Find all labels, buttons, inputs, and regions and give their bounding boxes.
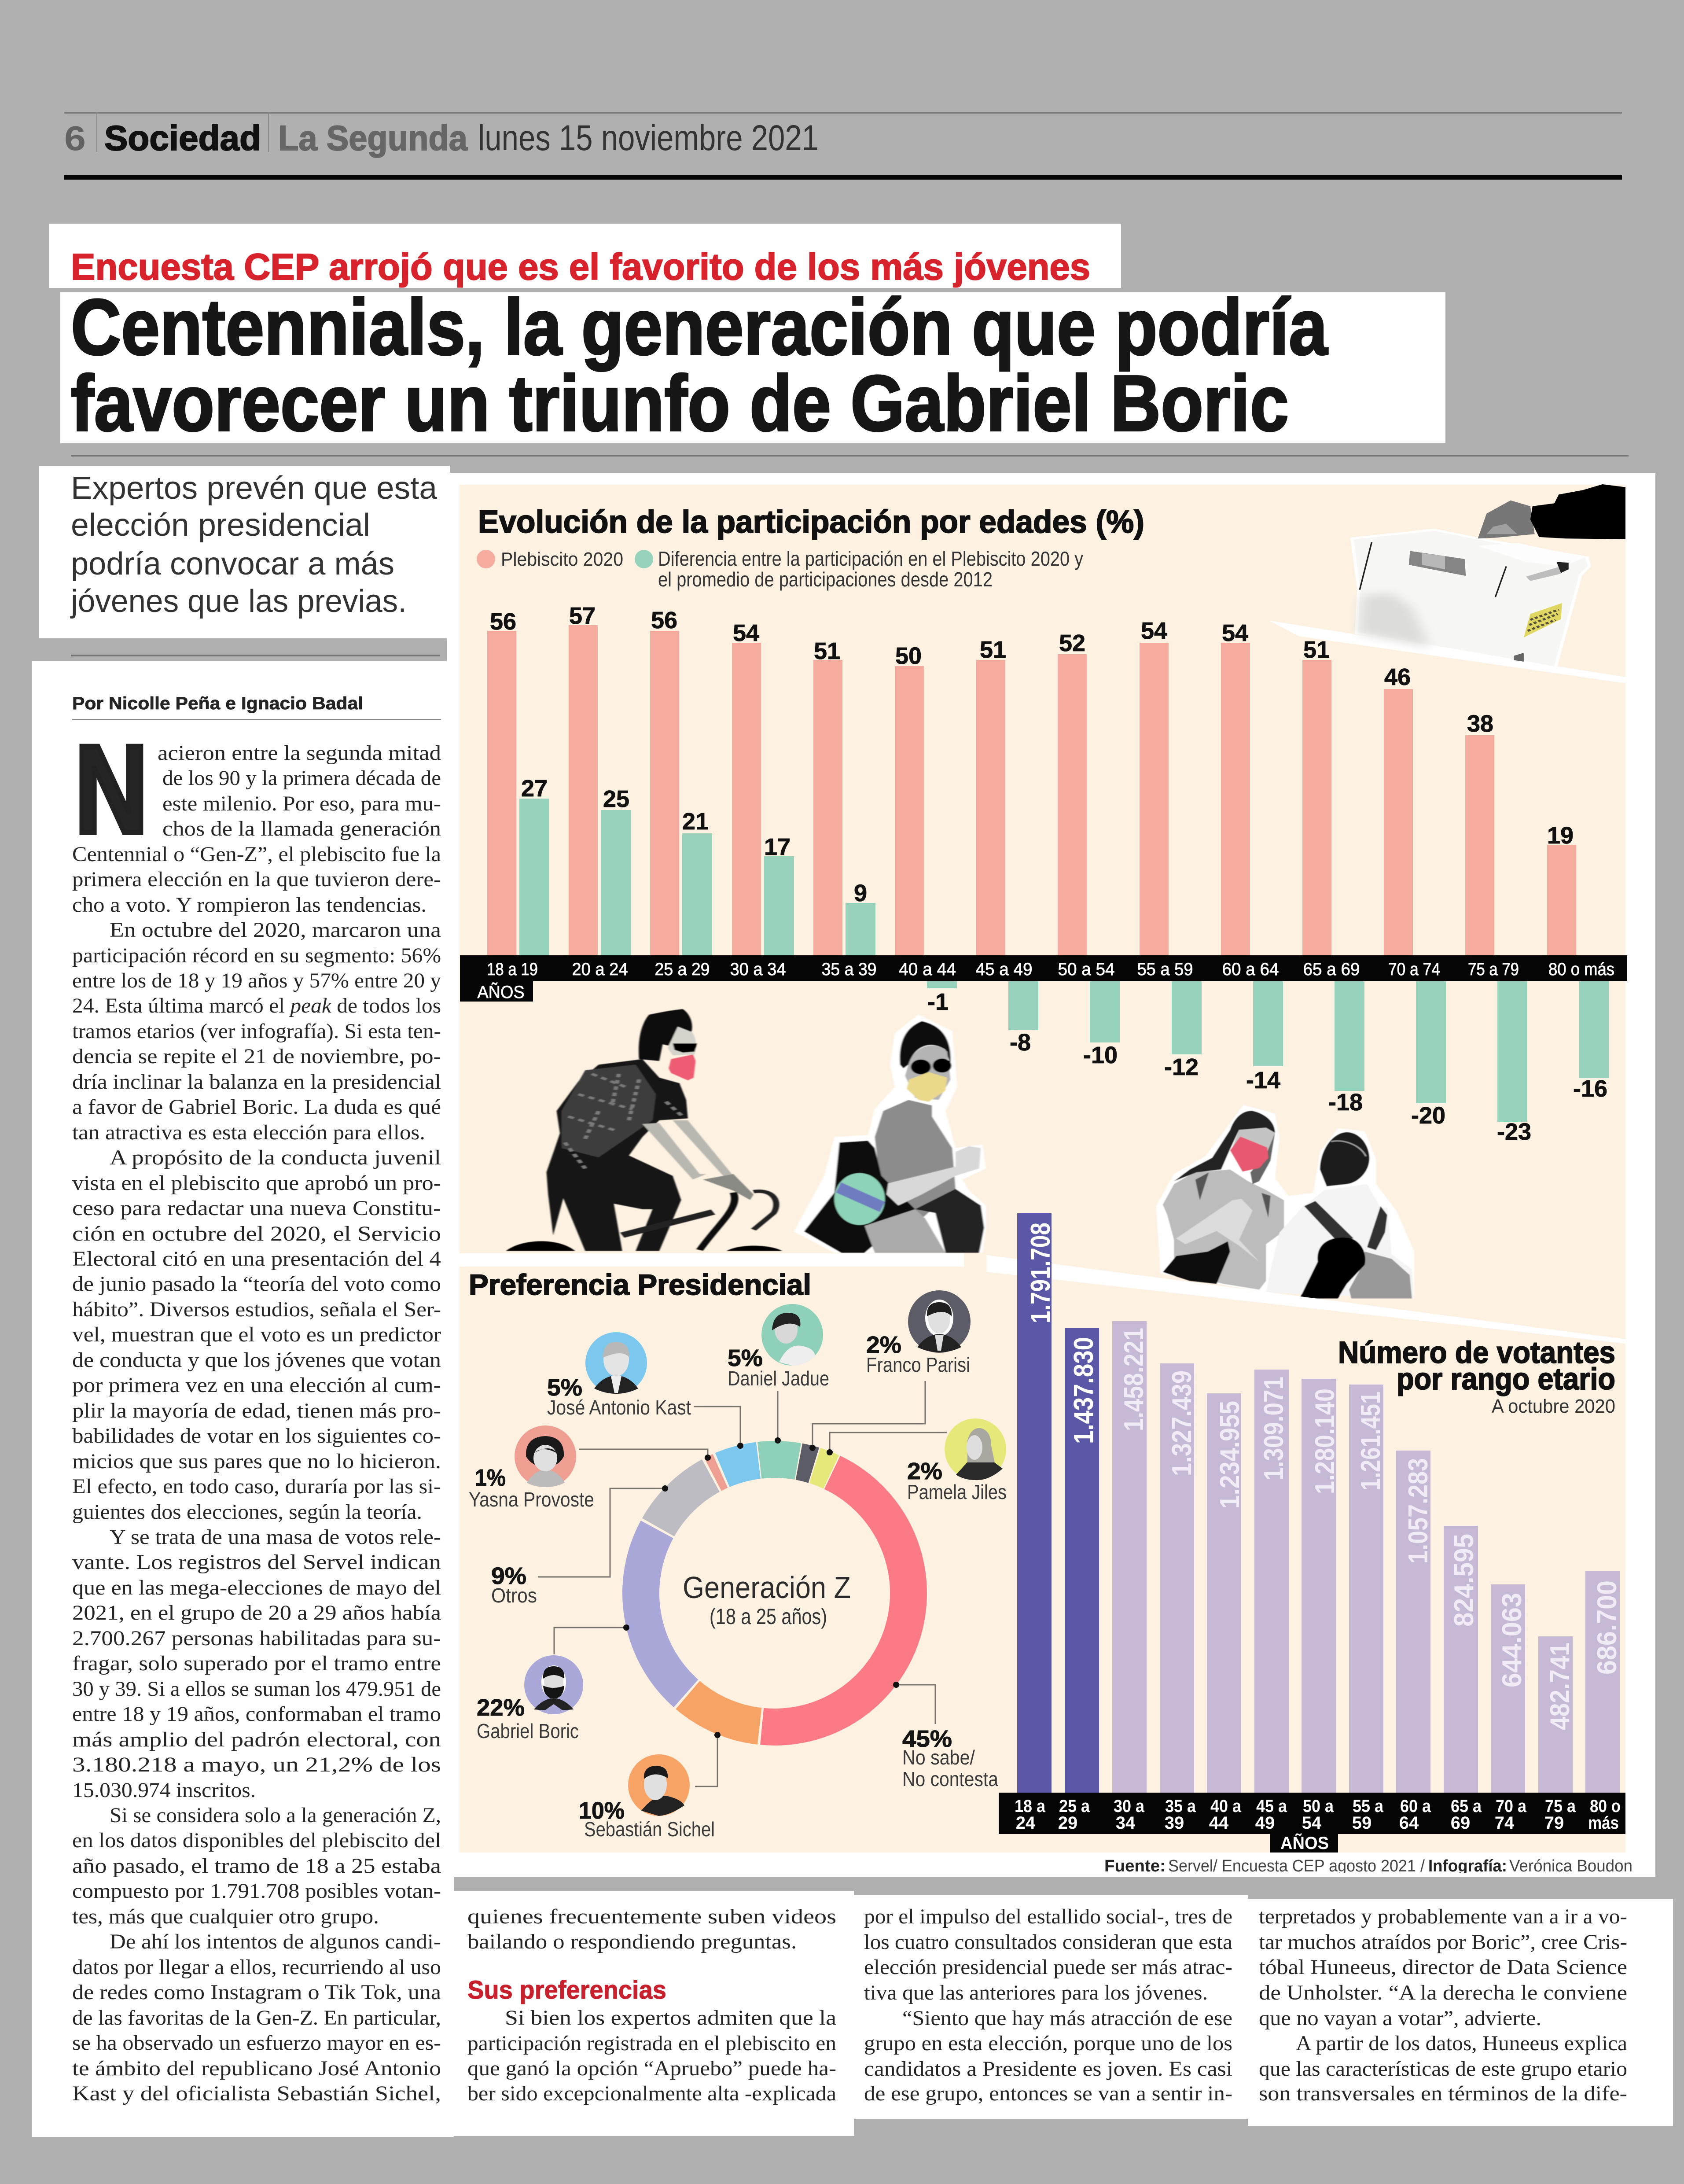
candidate: Franco Parisi: 2% (866, 1332, 901, 1358)
bar value labels: 21 (682, 808, 709, 835)
article column 1: te ámbito del republicano José Antonio (72, 2057, 441, 2080)
page header: Sociedad (104, 118, 261, 158)
age axis band: 55 a 59 (1137, 960, 1193, 979)
voters chart title (1338, 1335, 1615, 1417)
article column 2 (454, 1891, 854, 2136)
article column 1: tes, más que cualquier otro grupo. (72, 1905, 379, 1928)
chart legend: Diferencia entre la participación en el Plebiscito 2020 y (658, 547, 1083, 570)
photo: cyclist with pink mask (506, 1009, 782, 1251)
voters age axis band: AÑOS (1280, 1833, 1329, 1853)
article column 4: que no vayan a votar”, advierte. (1259, 2007, 1541, 2030)
candidate: Yasna Provoste: Yasna Provoste (469, 1488, 594, 1511)
article column 1: dencia se repite el 21 de noviembre, po- (72, 1045, 441, 1068)
article column 2: Si bien los expertos admiten que la (505, 2006, 836, 2029)
candidate: Gabriel Boric: Gabriel Boric (477, 1720, 579, 1742)
candidate: Franco Parisi (866, 1290, 971, 1376)
article column 4 (1248, 1899, 1673, 2126)
article column 1: babilidades de votar en los siguientes co- (72, 1424, 441, 1447)
voters age axis band: 25 a (1059, 1797, 1090, 1816)
donut center label (683, 1570, 851, 1629)
candidate: Pamela Jiles: 2% (907, 1458, 942, 1484)
article column 4: tóbal Huneeus, director de Data Science (1259, 1956, 1627, 1979)
voters age axis band: 39 (1165, 1813, 1184, 1833)
voter value labels: 1.458.221 (1119, 1328, 1149, 1431)
candidate: Pamela Jiles (907, 1418, 1007, 1503)
voters age axis band: 44 (1209, 1813, 1229, 1833)
page header: lunes 15 noviembre 2021 (478, 118, 819, 158)
candidate: Pamela Jiles: Pamela Jiles (907, 1481, 1007, 1503)
voter value labels: 686.700 (1592, 1580, 1622, 1675)
article column 1: vista en el plebiscito que aprobó un pro- (72, 1171, 441, 1195)
article column 1: participación récord en su segmento: 56% (72, 944, 441, 967)
bar value labels: 54 (1222, 620, 1248, 646)
voters age axis band: 34 (1116, 1813, 1136, 1833)
article column 1: de los 90 y la primera década de (162, 766, 441, 790)
main title: favorecer un triunfo de Gabriel Boric (71, 359, 1289, 448)
donut title: Preferencia Presidencial (469, 1268, 811, 1301)
icon: ballot box with hand (1352, 484, 1625, 667)
candidate: José Antonio Kast: 5% (547, 1374, 582, 1401)
kicker headline (49, 224, 1121, 288)
panel: infographic white backing (447, 473, 1655, 1877)
article column 2: quienes frecuentemente suben videos (467, 1905, 836, 1928)
article column 3: de ese grupo, entonces se van a sentir in- (864, 2082, 1232, 2105)
deck text: podría convocar a más (71, 546, 394, 582)
voters age axis band: 18 a (1015, 1797, 1046, 1816)
article column 1: ción en octubre del 2020, el Servicio (72, 1222, 441, 1245)
article column 1: Kast y del oficialista Sebastián Sichel, (72, 2082, 441, 2105)
donut center label: (18 a 25 años) (710, 1604, 827, 1629)
voters age axis band: 79 (1544, 1813, 1564, 1833)
label: otros: Otros (491, 1584, 537, 1607)
age axis band: 65 a 69 (1303, 960, 1360, 979)
bar value labels: 51 (1303, 637, 1330, 663)
candidate: Daniel Jadue (728, 1304, 829, 1390)
article column 1: Por Nicolle Peña e Ignacio Badal (72, 694, 363, 713)
chart legend: el promedio de participaciones desde 2012 (658, 568, 993, 591)
article column 1: vel, muestran que el voto es un predictor (72, 1323, 441, 1346)
article column 3: por el impulso del estallido social-, tres de (864, 1905, 1232, 1928)
article column 2: participación registrada en el plebiscito en (467, 2032, 836, 2055)
voter value labels: 1.280.140 (1310, 1388, 1340, 1494)
bar value labels: 25 (603, 786, 629, 812)
bar value labels: 54 (1141, 618, 1167, 644)
chart legend: Plebiscito 2020 (501, 549, 623, 570)
donut center label: Generación Z (683, 1570, 851, 1605)
article column 1: que en las mega-elecciones de mayo del (72, 1576, 441, 1599)
article column 1: De ahí los intentos de algunos candi- (110, 1930, 441, 1953)
bar value labels: -10 (1083, 1042, 1118, 1068)
bar value labels: 56 (490, 608, 516, 635)
article column 1: hábito”. Diversos estudios, señala el Ser- (72, 1298, 441, 1321)
candidate: Yasna Provoste (469, 1425, 594, 1511)
article column 1: N (75, 720, 148, 859)
voters age axis band: 70 a (1496, 1797, 1527, 1816)
article column 1: 2021, en el grupo de 20 a 29 años había (72, 1601, 441, 1624)
article column 1: dría inclinar la balanza en la presidencial (72, 1070, 441, 1094)
age axis band: 45 a 49 (975, 960, 1033, 979)
voters age axis band: 30 a (1114, 1797, 1145, 1816)
age axis band: 75 a 79 (1468, 960, 1519, 979)
article column 1: entre los de 18 y 19 años y 57% entre 20 y (72, 969, 441, 992)
voters chart title: por rango etario (1397, 1362, 1615, 1396)
voter value labels: 1.234.955 (1215, 1401, 1245, 1509)
voters chart title: A octubre 2020 (1492, 1396, 1615, 1417)
candidate: Gabriel Boric: 22% (477, 1694, 525, 1721)
deck text: elección presidencial (71, 508, 370, 543)
article column 1: año pasado, el tramo de 18 a 25 estaba (72, 1854, 441, 1878)
bar value labels: 57 (569, 603, 596, 629)
article column 1: datos por llegar a ellos, recurriendo al uso (72, 1956, 441, 1979)
candidate: Daniel Jadue: Daniel Jadue (728, 1367, 829, 1390)
voter value labels: 644.063 (1497, 1593, 1527, 1687)
label: no sabe / no contesta: No contesta (902, 1768, 998, 1790)
article column 2: ber sido excepcionalmente alta -explicada (467, 2082, 836, 2105)
age axis band: 70 a 74 (1388, 960, 1440, 979)
photo: woman with yellow mask (794, 1015, 986, 1253)
age axis band: 40 a 44 (899, 960, 956, 979)
article column 1: Centennial o “Gen-Z”, el plebiscito fue la (72, 843, 441, 866)
deck text: jóvenes que las previas. (70, 584, 407, 619)
bar value labels: 51 (814, 638, 840, 664)
chart title: Evolución de la participación por edades (%) (478, 505, 1144, 540)
article column 1: más amplio del padrón electoral, con (72, 1728, 441, 1751)
voters age axis band: 75 a (1545, 1797, 1576, 1816)
bar value labels: 17 (764, 834, 791, 860)
voters age axis band: 54 (1302, 1813, 1322, 1833)
source credit: Verónica Boudon (1509, 1857, 1633, 1875)
article column 1: a favor de Gabriel Boric. La duda es qué (72, 1095, 441, 1119)
candidate: Franco Parisi: Franco Parisi (866, 1353, 970, 1376)
age axis band: 18 a 19 (487, 960, 538, 979)
donut chart: preferencia presidencial (586, 1404, 963, 1782)
bar value labels: -20 (1411, 1102, 1445, 1129)
voter value labels: 1.791.708 (1026, 1223, 1056, 1323)
candidate: Gabriel Boric (477, 1655, 583, 1742)
label: no sabe / no contesta: No sabe/ (902, 1746, 975, 1769)
bar value labels: 9 (854, 880, 867, 906)
source credit: Fuente: (1104, 1857, 1166, 1875)
article column 3 (854, 1895, 1248, 2119)
bar value labels: -1 (927, 989, 949, 1015)
article column 1: fragar, solo superado por el tramo entre (72, 1652, 441, 1675)
voters age axis band: 40 a (1210, 1797, 1242, 1816)
photo: two students (1156, 1105, 1414, 1299)
candidate: Daniel Jadue: 5% (728, 1345, 763, 1371)
article column 3: “Siento que hay más atracción de ese (902, 2007, 1232, 2030)
article column 3: elección presidencial puede ser más atrac- (864, 1956, 1232, 1979)
article column 1: 30 y 39. Si a ellos se suman los 479.951 de (72, 1677, 441, 1701)
article column 1: primera elección en la que tuvieron dere- (72, 868, 441, 891)
article column 1: vante. Los registros del Servel indican (72, 1551, 441, 1574)
label: otros (491, 1563, 537, 1607)
voters age axis band: 50 a (1303, 1797, 1334, 1816)
bar value labels: 19 (1547, 822, 1574, 849)
article column 1: este milenio. Por eso, para mu- (162, 792, 441, 815)
article column 3: grupo en esta elección, porque uno de los (864, 2032, 1232, 2055)
bar value labels: 50 (895, 643, 922, 669)
page header: La Segunda (278, 118, 467, 158)
bar value labels: 54 (733, 620, 759, 646)
article column 2: que ganó la opción “Apruebo” puede ha- (467, 2057, 836, 2080)
article column 1: 3.180.218 a mayo, un 21,2% de los (72, 1753, 441, 1776)
source credit (1104, 1857, 1633, 1875)
article column 2: Sus preferencias (467, 1976, 666, 2004)
age axis band: 30 a 34 (730, 960, 786, 979)
article column 1: 24. Esta última marcó el peak de todos los (72, 994, 441, 1017)
article column 1: A propósito de la conducta juvenil (110, 1146, 441, 1169)
voters age axis band (999, 1793, 1625, 1853)
candidate: José Antonio Kast: José Antonio Kast (547, 1396, 691, 1419)
voters age axis band: 65 a (1451, 1797, 1482, 1816)
source credit: Infografía: (1428, 1857, 1507, 1875)
age axis band: 60 a 64 (1222, 960, 1279, 979)
source credit: Servel/ Encuesta CEP agosto 2021 / (1168, 1857, 1425, 1875)
article column 1 (32, 661, 454, 2137)
article column 1: Electoral citó en una presentación del 4 (72, 1247, 441, 1271)
voter value labels: 1.057.283 (1403, 1458, 1434, 1564)
kicker headline: Encuesta CEP arrojó que es el favorito de los más jóvenes (71, 246, 1090, 287)
age axis band (460, 955, 1627, 1002)
candidate: Sebastián Sichel: 10% (579, 1797, 625, 1824)
article column 4: de Unholster. “A la derecha le conviene (1259, 1981, 1627, 2004)
voters age axis band: 35 a (1165, 1797, 1196, 1816)
bar value labels: -18 (1328, 1089, 1363, 1116)
bar value labels: -14 (1246, 1067, 1280, 1094)
candidate: José Antonio Kast (547, 1332, 691, 1419)
label: otros: 9% (491, 1563, 526, 1589)
bar value labels: -16 (1573, 1075, 1607, 1102)
deck text (39, 466, 450, 638)
article column 1: plir la mayoría de edad, tienen más pro- (72, 1399, 441, 1422)
voters age axis band: 45 a (1256, 1797, 1287, 1816)
article column 1: de conducta y que los jóvenes que votan (72, 1348, 441, 1372)
article column 3: candidatos a Presidente es joven. Es casi (864, 2057, 1232, 2081)
article column 1: ceso para redactar una nueva Constitu- (72, 1197, 441, 1220)
voters age axis band: 24 (1016, 1813, 1036, 1833)
article column 1: se ha observado un esfuerzo mayor en es- (72, 2031, 441, 2055)
article column 1: Si se considera solo a la generación Z, (110, 1804, 441, 1827)
voters age axis band: 60 a (1400, 1797, 1431, 1816)
panel: infographic cream background (460, 485, 1625, 1853)
bar value labels: 51 (980, 637, 1006, 663)
bar value labels (490, 603, 1607, 1145)
chart legend (477, 547, 1083, 591)
article column 4: tar muchos atraídos por Boric”, cree Cris- (1259, 1930, 1627, 1954)
bar value labels: 27 (521, 775, 548, 802)
article column 1: 2.700.267 personas habilitadas para su- (72, 1627, 441, 1650)
voter value labels: 1.309.071 (1259, 1377, 1289, 1481)
page header (64, 112, 1622, 180)
article column 1: de redes como Instagram o Tik Tok, una (72, 1981, 441, 2004)
voters age axis band: 55 a (1353, 1797, 1384, 1816)
voters age axis band: 49 (1255, 1813, 1275, 1833)
deck text: Expertos prevén que esta (71, 471, 438, 506)
candidate: Yasna Provoste: 1% (475, 1465, 506, 1491)
page header: 6 (64, 119, 86, 158)
label: no sabe / no contesta: 45% (902, 1726, 952, 1752)
article column 1: Y se trata de una masa de votos rele- (110, 1525, 441, 1549)
voters age axis band: 29 (1058, 1813, 1077, 1833)
article column 1: El efecto, en todo caso, duraría por las si- (72, 1475, 441, 1498)
voters age axis band: más (1588, 1813, 1619, 1833)
label: no sabe / no contesta (902, 1726, 998, 1790)
article column 4: terpretados y probablemente van a ir a vo- (1259, 1905, 1627, 1928)
article column 1: acieron entre la segunda mitad (158, 741, 441, 765)
bar value labels: -8 (1010, 1029, 1031, 1056)
main title: Centennials, la generación que podría (71, 283, 1328, 372)
bar chart: difference (519, 799, 1609, 1122)
article column 1: guientes dos elecciones, según la teoría. (72, 1500, 422, 1524)
voter value labels: 482.741 (1545, 1643, 1575, 1730)
article column 4: son transversales en términos de la dife- (1259, 2082, 1627, 2105)
age axis band: 20 a 24 (572, 960, 628, 979)
bar value labels: 46 (1384, 664, 1411, 690)
article column 1: de junio pasado la “teoría del voto como (72, 1272, 441, 1296)
age axis band: AÑOS (477, 982, 525, 1002)
voter value labels: 1.327.439 (1167, 1370, 1197, 1476)
age axis band: 35 a 39 (821, 960, 877, 979)
article column 1: chos de la llamada generación (162, 817, 441, 840)
bar chart: número de votantes (1017, 1213, 1620, 1793)
article column 2: bailando o respondiendo preguntas. (467, 1930, 797, 1953)
bar value labels: 56 (651, 607, 677, 633)
candidate: Sebastián Sichel (579, 1754, 715, 1841)
article column 3: los cuatro consultados consideran que esta (864, 1930, 1232, 1954)
candidate: Sebastián Sichel: Sebastián Sichel (584, 1818, 715, 1841)
article column 1: tan atractiva es esta elección para ellos. (72, 1121, 425, 1144)
article column 1: tramos etarios (ver infografía). Si esta ten- (72, 1020, 441, 1043)
age axis band: 80 o más (1548, 960, 1614, 979)
article column 1: En octubre del 2020, marcaron una (110, 918, 441, 942)
voters chart title: Número de votantes (1338, 1335, 1615, 1370)
bar value labels: 38 (1467, 711, 1493, 737)
article column 1: por primera vez en una elección al cum- (72, 1374, 441, 1397)
voter value labels: 1.437.830 (1069, 1337, 1099, 1444)
voters age axis band: 69 (1451, 1813, 1470, 1833)
bar value labels: -12 (1164, 1054, 1199, 1080)
voters age axis band: 80 o (1590, 1797, 1621, 1816)
bar value labels: 52 (1059, 630, 1085, 656)
voters age axis band: 74 (1495, 1813, 1515, 1833)
bar chart: plebiscito 2020 (487, 625, 1576, 955)
voter value labels: 824.595 (1449, 1534, 1479, 1627)
donut leader lines (538, 1381, 947, 1786)
voters age axis band: 59 (1352, 1813, 1371, 1833)
voter value labels (1026, 1223, 1622, 1730)
article column 1: cho a voto. Y rompieron las tendencias. (72, 893, 427, 917)
article column 1: compuesto por 1.791.708 posibles votan- (72, 1879, 441, 1903)
age axis band: 50 a 54 (1058, 960, 1114, 979)
article column 1: entre 18 y 19 años, conformaban el tramo (72, 1702, 441, 1726)
voter value labels: 1.261.451 (1356, 1392, 1386, 1491)
article column 4: A partir de los datos, Huneeus explica (1296, 2032, 1627, 2055)
article column 1: de las favoritas de la Gen-Z. En particular, (72, 2006, 441, 2029)
article column 1: micios que sus pares que no lo hicieron. (72, 1450, 441, 1473)
bar value labels: -23 (1497, 1119, 1531, 1145)
article column 4: que las características de este grupo etario (1259, 2057, 1627, 2081)
main title (60, 283, 1445, 448)
article column 3: tiva que las anteriores para los jóvenes. (864, 1981, 1208, 2004)
article column 1: en los datos disponibles del plebiscito del (72, 1829, 441, 1852)
article column 1: 15.030.974 inscritos. (72, 1779, 256, 1802)
age axis band: 25 a 29 (655, 960, 710, 979)
voters age axis band: 64 (1399, 1813, 1419, 1833)
